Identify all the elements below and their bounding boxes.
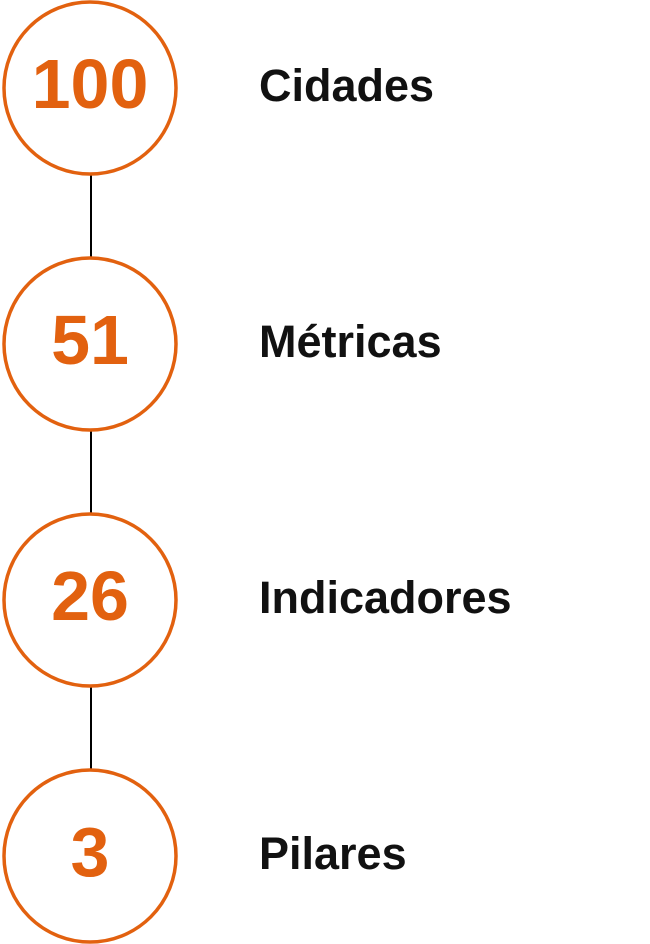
item: 3 Pilares: Pilares: [259, 828, 407, 879]
item: 51 Métricas: Métricas: [259, 316, 442, 367]
item: 26 Indicadores: 26: [51, 557, 129, 635]
connector lines: [90, 175, 92, 770]
item: 51 Métricas: 51: [51, 301, 129, 379]
item: 51 Métricas: [4, 258, 442, 430]
item: 100 Cidades: 100: [32, 45, 148, 123]
item: 100 Cidades: Cidades: [259, 60, 434, 111]
item: 3 Pilares: [4, 770, 407, 942]
item: 3 Pilares: 3: [71, 813, 109, 891]
item: 26 Indicadores: [4, 514, 512, 686]
item: 26 Indicadores: Indicadores: [259, 572, 512, 623]
item: 100 Cidades: [4, 2, 434, 174]
